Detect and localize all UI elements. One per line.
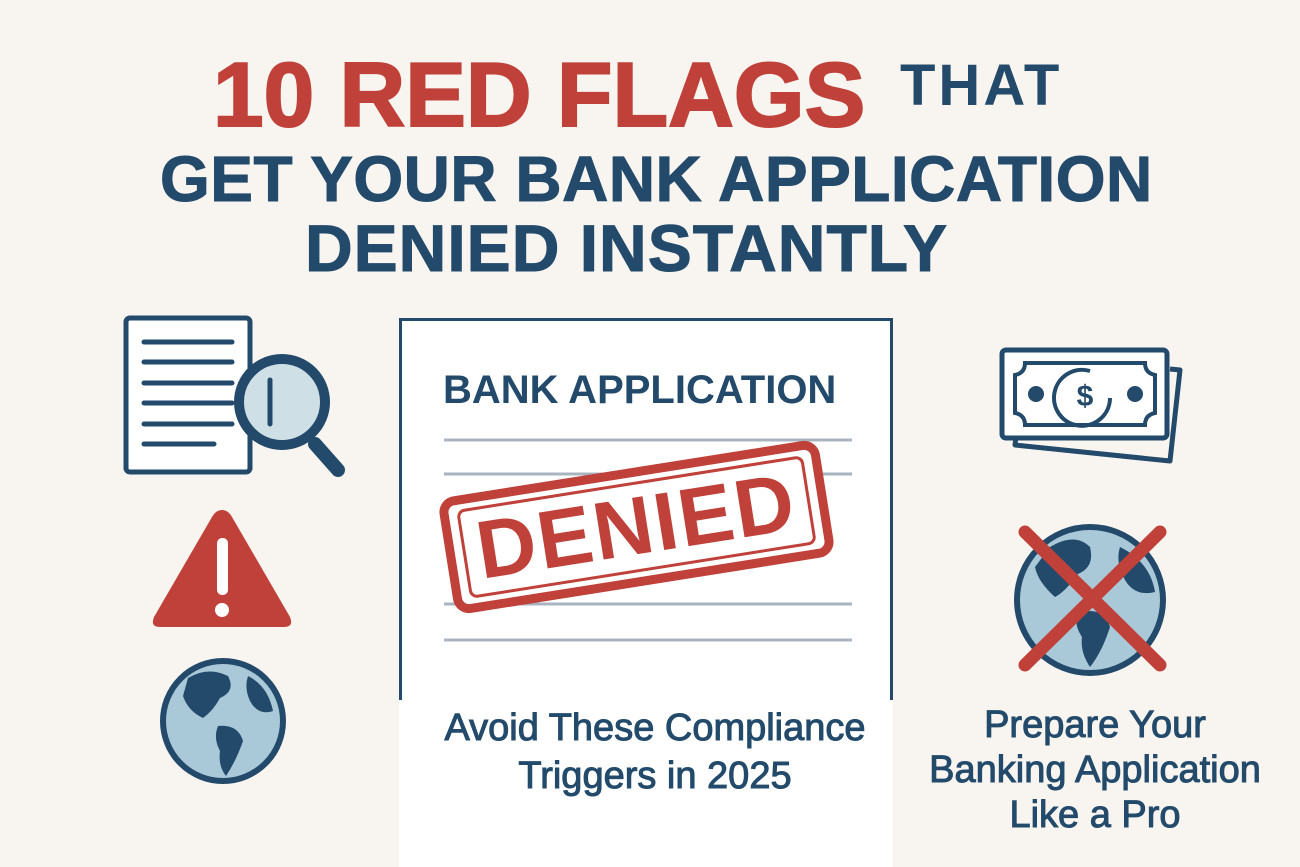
title: DENIED INSTANTLY [305,211,948,285]
title: 10 RED FLAGS [213,45,865,146]
caption: prepare like a pro: Banking Application [929,749,1261,791]
title: THAT [900,53,1062,118]
title [160,45,1153,285]
panel: bank application card [399,318,893,867]
heading: bank application: BANK APPLICATION [443,368,836,412]
caption: compliance triggers [444,707,866,797]
icon: money: $ [1077,380,1094,413]
stamp: denied [437,439,836,615]
caption: prepare like a pro: Prepare Your [984,704,1206,746]
title: GET YOUR BANK APPLICATION [160,143,1153,215]
caption: prepare like a pro [929,704,1261,836]
caption: compliance triggers: Triggers in 2025 [518,755,792,797]
icon: warning triangle [152,510,292,627]
icon: globe crossed out [1014,524,1166,676]
icon: document with magnifier [124,316,345,477]
stamp: denied: DENIED [470,456,802,597]
caption: compliance triggers: Avoid These Compliance [444,707,866,749]
icon: money [1000,348,1182,464]
icon: globe [160,658,286,784]
caption: prepare like a pro: Like a Pro [1009,794,1181,836]
